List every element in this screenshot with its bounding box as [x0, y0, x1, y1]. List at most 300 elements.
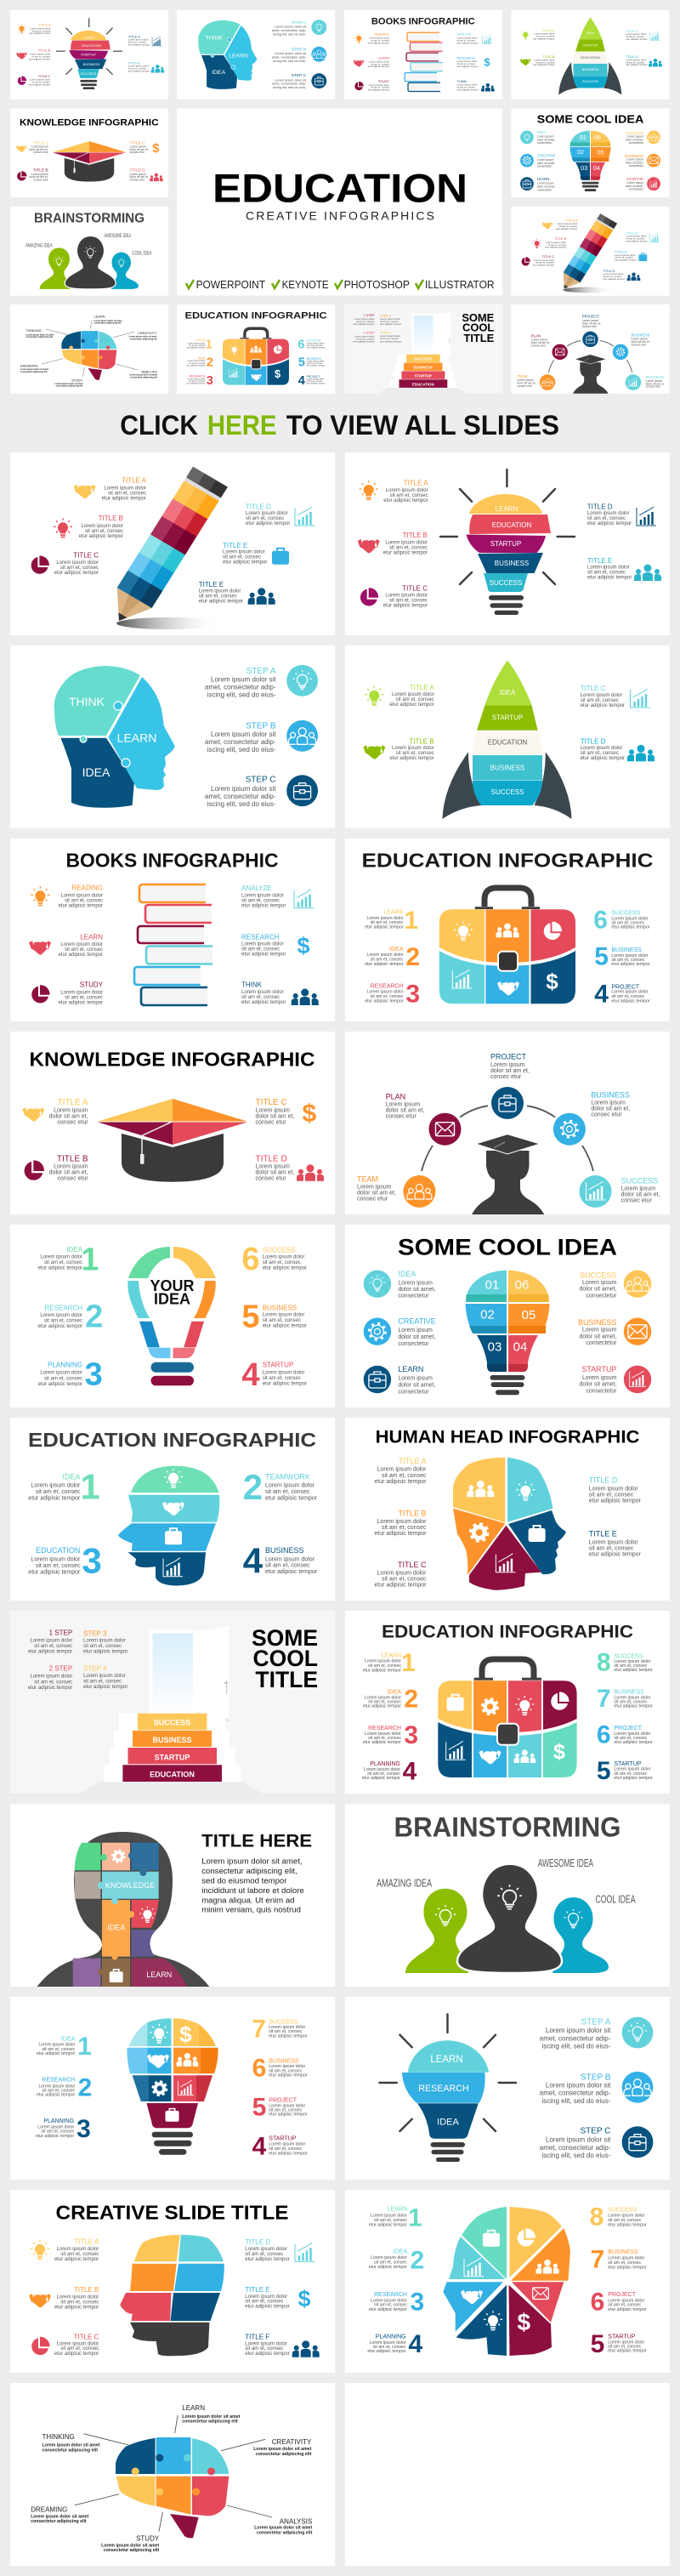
title: TITLE	[255, 1667, 318, 1692]
label: creativity: CREATIVITY	[272, 2438, 312, 2446]
step B: Lorem ipsum dolor sit	[211, 731, 275, 738]
label: title A	[374, 1457, 427, 1485]
step 2: etur adipisic tempor	[363, 1704, 401, 1709]
label: title B: TITLE B	[99, 515, 123, 522]
step 4	[241, 1357, 307, 1393]
panel: creative head slide	[10, 2190, 335, 2373]
label: title B: TITLE B	[74, 2286, 99, 2294]
label: dreaming	[31, 2505, 88, 2524]
step 5: PROJECT	[269, 2097, 298, 2103]
title: SOME COOL IDEA	[398, 1234, 617, 1260]
label: title A: TITLE A	[74, 2238, 99, 2245]
item: idea	[364, 1270, 435, 1299]
step 3	[28, 1540, 102, 1580]
label: title F: Lorem ipsum dolor	[245, 2341, 287, 2346]
step 4: STARTUP	[263, 1362, 293, 1369]
rocket body: BUSINESS	[490, 764, 524, 771]
step 3: PLANNING	[43, 2118, 74, 2124]
step 5: etur adipisic tempor	[263, 1324, 307, 1329]
step 6: 6	[241, 1242, 260, 1277]
label: learn: consectetur adipiscing elit	[182, 2419, 238, 2424]
step 3: sit am et, consec	[374, 2303, 407, 2308]
label: title F: etur adipisic tempor	[245, 2351, 290, 2357]
step 1: sit am et, consec	[368, 1663, 401, 1669]
step 2: 2 STEP	[49, 1665, 72, 1673]
label: title C	[581, 685, 649, 708]
item: success: Lorem ipsum	[582, 1280, 617, 1286]
step 2: 2	[404, 1686, 418, 1714]
software list: PHOTOSHOP	[344, 278, 410, 291]
step B: amet, consectetur adip-	[205, 738, 276, 746]
label: title C: dolor sit am et,	[255, 1113, 294, 1119]
label: title C: TITLE C	[581, 685, 606, 692]
step 3: Lorem ipsum dolor	[365, 1732, 401, 1737]
heading: education: EDUCATION	[212, 166, 468, 211]
label: think: THINK	[241, 981, 263, 989]
step 7: sit am et, consec	[614, 1699, 648, 1704]
step 6	[591, 2289, 647, 2317]
label: learn: sit am et, consec	[65, 947, 103, 952]
label: title C: Lorem ipsum dolor	[56, 560, 99, 566]
body text: sed do eiusmod tempor	[201, 1876, 287, 1886]
label: analyze	[241, 884, 314, 909]
step 7: Lorem ipsum dolor	[614, 1695, 650, 1700]
label: learn	[29, 933, 103, 958]
step 3: sit am et, consec	[44, 1376, 82, 1381]
label: title A: consec etur	[57, 1119, 88, 1125]
step 3: Lorem ipsum dolor	[31, 1556, 80, 1562]
title: EDUCATION INFOGRAPHIC	[28, 1429, 316, 1451]
label: title C	[374, 1561, 427, 1589]
step A: STEP A	[246, 667, 276, 676]
door frame	[148, 1630, 196, 1715]
label: success 6	[593, 906, 650, 934]
panel: human head slide	[345, 1418, 670, 1601]
label: title E: etur adipisic tempor	[587, 576, 632, 581]
step 7: etur adipisic tempor	[608, 2265, 647, 2270]
item: idea: consectetur	[398, 1294, 429, 1299]
label: idea 2: etur adipisic tempor	[365, 962, 404, 967]
item: learn: LEARN	[398, 1365, 423, 1373]
step 2: TEAMWORK	[265, 1472, 310, 1481]
label: title A	[360, 479, 428, 503]
numbered bulb: 02	[480, 1307, 495, 1322]
label: analysis: ANALYSIS	[280, 2517, 312, 2525]
step 5: 5	[241, 1299, 260, 1334]
step 3	[363, 1721, 418, 1749]
label: title F: sit am et, consec	[245, 2346, 283, 2351]
step 8: Lorem ipsum dolor	[614, 1659, 650, 1664]
label: think: Lorem ipsum dolor	[241, 990, 284, 995]
step 2: IDEA	[388, 1690, 401, 1696]
label: title A: sit am et, consec	[108, 491, 146, 496]
step 1: etur adipisic tempor	[38, 1266, 82, 1271]
step 6: PROJECT	[608, 2292, 637, 2298]
step 1	[369, 2204, 422, 2232]
step 4: etur adipisic tempor	[367, 2349, 406, 2354]
panel: striped head slide	[10, 1418, 335, 1601]
step 3: 3	[82, 1540, 102, 1580]
bulb center text: IDEA	[154, 1291, 190, 1308]
label: title E navy	[199, 581, 275, 605]
label: title D: TITLE D	[581, 737, 606, 745]
call to action heading: TO VIEW ALL SLIDES	[286, 410, 559, 441]
node: plan: dolor sit am et,	[386, 1108, 425, 1114]
label: title B	[358, 532, 428, 556]
silhouette	[37, 1832, 209, 1987]
label: title A	[22, 1098, 88, 1125]
step 7: 7	[252, 2016, 266, 2044]
bulb rays	[440, 469, 575, 584]
step 4: sit am et, consec	[373, 2345, 406, 2350]
label: business 5: Lorem ipsum dolor	[611, 953, 648, 958]
software list: ILLUSTRATOR	[425, 278, 495, 291]
rocket body: STARTUP	[492, 714, 523, 721]
label: business 5: sit am et, consec	[611, 958, 645, 963]
step 5: sit am et, consec	[614, 1771, 648, 1777]
puzzle pieces: LEARN	[146, 1970, 172, 1979]
label: reading: Lorem ipsum dolor	[60, 894, 103, 899]
step 6: 6	[591, 2289, 604, 2317]
step 2: sit am et, consec	[42, 2089, 76, 2094]
label: idea 2: sit am et, consec	[371, 958, 404, 963]
step 8: SUCCESS	[608, 2208, 637, 2214]
step 7: etur adipisic tempor	[269, 2033, 308, 2039]
label: analyze: etur adipisic tempor	[241, 904, 286, 909]
label: dreaming: Lorem ipsum dolor sit amet	[31, 2514, 88, 2519]
label: title D: sit am et, consec	[581, 751, 619, 756]
step 1	[37, 2033, 92, 2061]
step 2: IDEA	[394, 2249, 407, 2255]
stairs: SUCCESS	[154, 1719, 190, 1727]
label: title B: etur adipisic tempor	[383, 551, 428, 556]
label: title D: Lorem ipsum dolor	[245, 2247, 287, 2252]
label: title C: etur adipisic tempor	[54, 2351, 99, 2357]
step 4: 4	[243, 1541, 264, 1581]
step 4: sit am et, consec	[83, 1680, 122, 1685]
node: plan	[386, 1092, 461, 1146]
graduate silhouette	[472, 1134, 544, 1214]
label: title C: sit am et, consec	[581, 698, 619, 703]
label: title A	[365, 684, 434, 708]
bulb layers: LEARN	[430, 2055, 463, 2065]
item: startup: consectetur	[586, 1388, 617, 1394]
node: project: consec etur	[490, 1074, 522, 1080]
step 6: etur adipisic tempor	[269, 2073, 308, 2078]
step 7	[252, 2016, 308, 2044]
layered bulb: STARTUP	[490, 540, 521, 548]
bulb layers	[402, 2040, 489, 2162]
step 8: 8	[597, 1649, 611, 1677]
label: project 4	[594, 981, 650, 1009]
step C: amet, consectetur adip-	[540, 2144, 611, 2152]
label: research: RESEARCH	[241, 933, 280, 941]
step 5	[252, 2094, 308, 2122]
label: study	[101, 2535, 160, 2553]
label: title D: TITLE D	[245, 2238, 270, 2246]
body text: incididunt ut labore et dolore	[201, 1886, 304, 1896]
step C: STEP C	[580, 2126, 610, 2135]
step 1	[28, 1467, 100, 1507]
step 3: sit am et, consec	[36, 1563, 81, 1569]
step C: STEP C	[246, 775, 275, 784]
node: team: TEAM	[357, 1174, 378, 1183]
label: project 4: 4	[594, 981, 609, 1009]
label: title A: Lorem ipsum	[54, 1107, 88, 1113]
step 2: RESEARCH	[45, 1304, 82, 1311]
step B: iscing elit, sed do eius-	[207, 746, 276, 753]
label: title B	[29, 2286, 99, 2310]
step 1: Lorem ipsum dolor	[38, 2043, 75, 2048]
step 4	[367, 2330, 422, 2358]
step A: Lorem ipsum dolor sit	[211, 675, 275, 683]
step 6: Lorem ipsum dolor	[614, 1732, 650, 1737]
step 3: 3	[404, 1721, 418, 1749]
label: title B: etur adipisic tempor	[79, 534, 123, 539]
step 3: etur adipisic tempor	[83, 1650, 128, 1655]
label: title E teal: TITLE E	[223, 542, 247, 549]
label: title A: dolor sit am et,	[49, 1113, 88, 1119]
step 6	[597, 1720, 653, 1749]
layered bulb: LEARN	[496, 505, 518, 513]
label: title A: Lorem ipsum dolor	[104, 486, 146, 491]
step 5: Lorem ipsum dolor	[608, 2340, 644, 2346]
step 1: sit am et, consec	[34, 1644, 72, 1649]
panel: puzzle head slide	[10, 645, 335, 828]
figure: awesome idea: AWESOME IDEA	[538, 1857, 593, 1869]
step 1: 1	[408, 2204, 422, 2232]
step 8: sit am et, consec	[608, 2218, 642, 2223]
label: title C: Lorem ipsum dolor	[57, 2341, 99, 2346]
label: title E navy: Lorem ipsum dolor	[199, 589, 241, 594]
step 1: sit am et, consec	[44, 1260, 82, 1265]
briefcase: $	[553, 1740, 565, 1764]
label: research 3: sit am et, consec	[371, 994, 404, 999]
panel: main cover title	[177, 109, 502, 296]
step B: amet, consectetur adip-	[540, 2090, 611, 2097]
label: title A: TITLE A	[399, 1457, 427, 1465]
step 1: Lorem ipsum dolor	[31, 1639, 72, 1644]
title: EDUCATION INFOGRAPHIC	[362, 850, 653, 872]
label: success 6: etur adipisic tempor	[611, 924, 650, 930]
step 1: etur adipisic tempor	[37, 2051, 76, 2056]
item: startup: Lorem ipsum	[582, 1375, 617, 1381]
software list: POWERPOINT	[196, 278, 265, 291]
item: creative: Lorem ipsum	[398, 1328, 433, 1333]
step 5: sit am et, consec	[263, 1318, 301, 1323]
item: learn: consectetur	[398, 1390, 429, 1396]
step 4: sit am et, consec	[367, 1771, 400, 1777]
title: BOOKS INFOGRAPHIC	[66, 850, 279, 872]
label: title D: etur adipisic tempor	[245, 2257, 290, 2262]
label: reading: etur adipisic tempor	[59, 904, 103, 909]
label: reading: READING	[72, 884, 103, 891]
step B: iscing elit, sed do eius-	[541, 2097, 611, 2105]
step A: amet, consectetur adip-	[540, 2034, 611, 2042]
body text: magna aliqua. Ut enim ad	[201, 1896, 295, 1905]
step 4	[252, 2132, 308, 2160]
step 6	[252, 2055, 308, 2083]
step 4: sit am et, consec	[269, 2147, 303, 2152]
thumbnail: brainstorming slide	[10, 207, 168, 296]
label: creativity: Lorem ipsum dolor sit amet	[253, 2447, 312, 2452]
step 6: BUSINESS	[269, 2058, 299, 2064]
step 2: 2	[85, 1299, 103, 1334]
head puzzle: THINK	[69, 695, 105, 708]
item: creative: consectetur	[398, 1341, 429, 1347]
label: reading	[31, 884, 103, 909]
label: title B: etur adipisic tempor	[54, 2305, 99, 2310]
step 5: STARTUP	[608, 2334, 636, 2340]
step 7: 7	[591, 2246, 604, 2274]
label: research 3	[365, 981, 420, 1009]
stairs: BUSINESS	[152, 1736, 192, 1744]
label: analysis: Lorem ipsum dolor sit amet	[254, 2525, 313, 2530]
panel: graduate ring slide	[345, 1032, 670, 1214]
step 4	[83, 1665, 128, 1690]
label: title C: sit am et, consec	[389, 599, 428, 604]
label: title C	[255, 1098, 316, 1128]
label: title C: TITLE C	[74, 2334, 99, 2341]
node: success: Lorem ipsum	[621, 1186, 655, 1192]
step 8: etur adipisic tempor	[614, 1668, 653, 1673]
label: title D: sit am et, consec	[589, 1492, 634, 1498]
title	[252, 1625, 318, 1692]
step 4: 4	[241, 1357, 260, 1393]
item: idea: Lorem ipsum	[398, 1280, 433, 1286]
step 2	[28, 1665, 72, 1691]
label: title B: sit am et, consec	[389, 546, 428, 551]
step 3: Lorem ipsum dolor	[83, 1639, 126, 1644]
label: title C: TITLE C	[73, 551, 99, 559]
figure: amazing idea: AMAZING IDEA	[377, 1876, 432, 1889]
label: research: sit am et, consec	[241, 947, 280, 952]
step 6: Lorem ipsum dolor	[263, 1255, 304, 1260]
step 5: Lorem ipsum dolor	[269, 2103, 305, 2108]
step 2: etur adipisic tempor	[369, 2265, 407, 2270]
item: learn	[364, 1365, 435, 1396]
item: business: dolor sit amet,	[580, 1333, 617, 1339]
label: study: Lorem ipsum dolor sit amet	[101, 2544, 159, 2549]
step 7: Lorem ipsum dolor	[608, 2255, 644, 2260]
label: title E: Lorem ipsum dolor	[245, 2295, 287, 2300]
node: business: dolor sit am et,	[591, 1106, 630, 1112]
label: title B: consec etur	[57, 1176, 88, 1182]
label: title E teal: sit am et, consec	[223, 555, 261, 560]
figure: awesome idea	[457, 1857, 593, 1973]
step B	[540, 2072, 653, 2105]
label: title A: TITLE A	[404, 479, 428, 486]
step 3: RESEARCH	[368, 1726, 401, 1732]
step 1: sit am et, consec	[42, 2047, 76, 2052]
brain puzzle	[116, 2437, 229, 2538]
step 5: etur adipisic tempor	[269, 2113, 308, 2118]
software list: KEYNOTE	[282, 278, 329, 291]
label: think: sit am et, consec	[241, 995, 280, 1000]
step 2: etur adipisic tempor	[265, 1495, 318, 1501]
step 4: STARTUP	[269, 2136, 297, 2142]
label: study: STUDY	[136, 2535, 160, 2543]
item: idea: dolor sit amet,	[398, 1287, 435, 1293]
label: title E: TITLE E	[245, 2286, 270, 2294]
step 7: Lorem ipsum dolor	[269, 2025, 305, 2030]
item: idea: IDEA	[398, 1270, 416, 1278]
call to action heading: HERE	[207, 410, 277, 441]
label: title D	[589, 1476, 642, 1504]
label: title E	[245, 2286, 311, 2312]
label: title C: etur adipisic tempor	[374, 1583, 427, 1589]
label: title B: Lorem ipsum dolor	[81, 524, 123, 529]
label: title F	[245, 2334, 320, 2357]
node: business: BUSINESS	[591, 1090, 630, 1099]
step 1: LEARN	[388, 2206, 407, 2212]
step 3: 3	[410, 2289, 424, 2317]
label: analysis	[254, 2517, 313, 2535]
step 2: Lorem ipsum dolor	[40, 1313, 82, 1318]
item: business: consectetur	[586, 1340, 617, 1346]
thumbnail: graduate ring slide	[512, 304, 670, 394]
node: project: PROJECT	[490, 1052, 527, 1061]
step 3: EDUCATION	[36, 1546, 80, 1555]
label: title C: TITLE C	[402, 584, 428, 592]
step 5	[597, 1757, 653, 1785]
label: title B: etur adipisic tempor	[389, 756, 434, 761]
item: success: consectetur	[586, 1293, 617, 1299]
panel: door and stairs slide	[10, 1611, 335, 1794]
bulb center text: YOUR	[150, 1277, 195, 1294]
label: title D: sit am et, consec	[246, 516, 284, 521]
step 1: LEARN	[382, 1653, 401, 1659]
step A: amet, consectetur adip-	[205, 684, 276, 691]
step 2	[38, 1299, 103, 1334]
step 3: 3	[76, 2115, 91, 2143]
step 4: etur adipisic tempor	[362, 1776, 400, 1781]
numbered bulb	[466, 1271, 549, 1395]
step 4: PLANNING	[376, 2334, 406, 2340]
label: research 3: etur adipisic tempor	[365, 998, 404, 1004]
label: project 4: Lorem ipsum dolor	[611, 990, 648, 995]
title: COOL	[252, 1646, 318, 1671]
label: title D: etur adipisic tempor	[587, 521, 632, 526]
step 3: etur adipisic tempor	[38, 1382, 82, 1387]
numbered bulb: 01	[485, 1277, 499, 1292]
graduation cap	[98, 1099, 247, 1182]
label: title F: TITLE F	[245, 2334, 269, 2341]
step 5: BUSINESS	[263, 1304, 297, 1311]
book stack	[134, 884, 212, 1005]
node: plan: consec etur	[386, 1114, 416, 1120]
step 5: etur adipisic tempor	[608, 2349, 647, 2354]
step 7: sit am et, consec	[269, 2029, 303, 2034]
step 3: STEP 3	[83, 1629, 107, 1637]
thumbnail: door slide	[344, 304, 502, 394]
layered bulb	[466, 494, 551, 592]
rocket fins	[442, 752, 571, 819]
label: learn: etur adipisic tempor	[59, 952, 103, 958]
label: title A: TITLE A	[57, 1098, 88, 1107]
thumbnail: brain slide	[10, 304, 168, 394]
stairs: EDUCATION	[150, 1771, 195, 1779]
item: business	[578, 1318, 651, 1346]
label: title B: Lorem ipsum dolor	[392, 746, 434, 751]
node: success	[580, 1175, 660, 1208]
step 4: sit am et, consec	[265, 1563, 310, 1569]
step 4: STEP 4	[83, 1665, 107, 1673]
step 5: sit am et, consec	[269, 2107, 303, 2113]
label: title C: TITLE C	[398, 1561, 427, 1569]
label: title E: Lorem ipsum dolor	[587, 566, 630, 571]
call to action heading: CLICK	[120, 410, 198, 441]
